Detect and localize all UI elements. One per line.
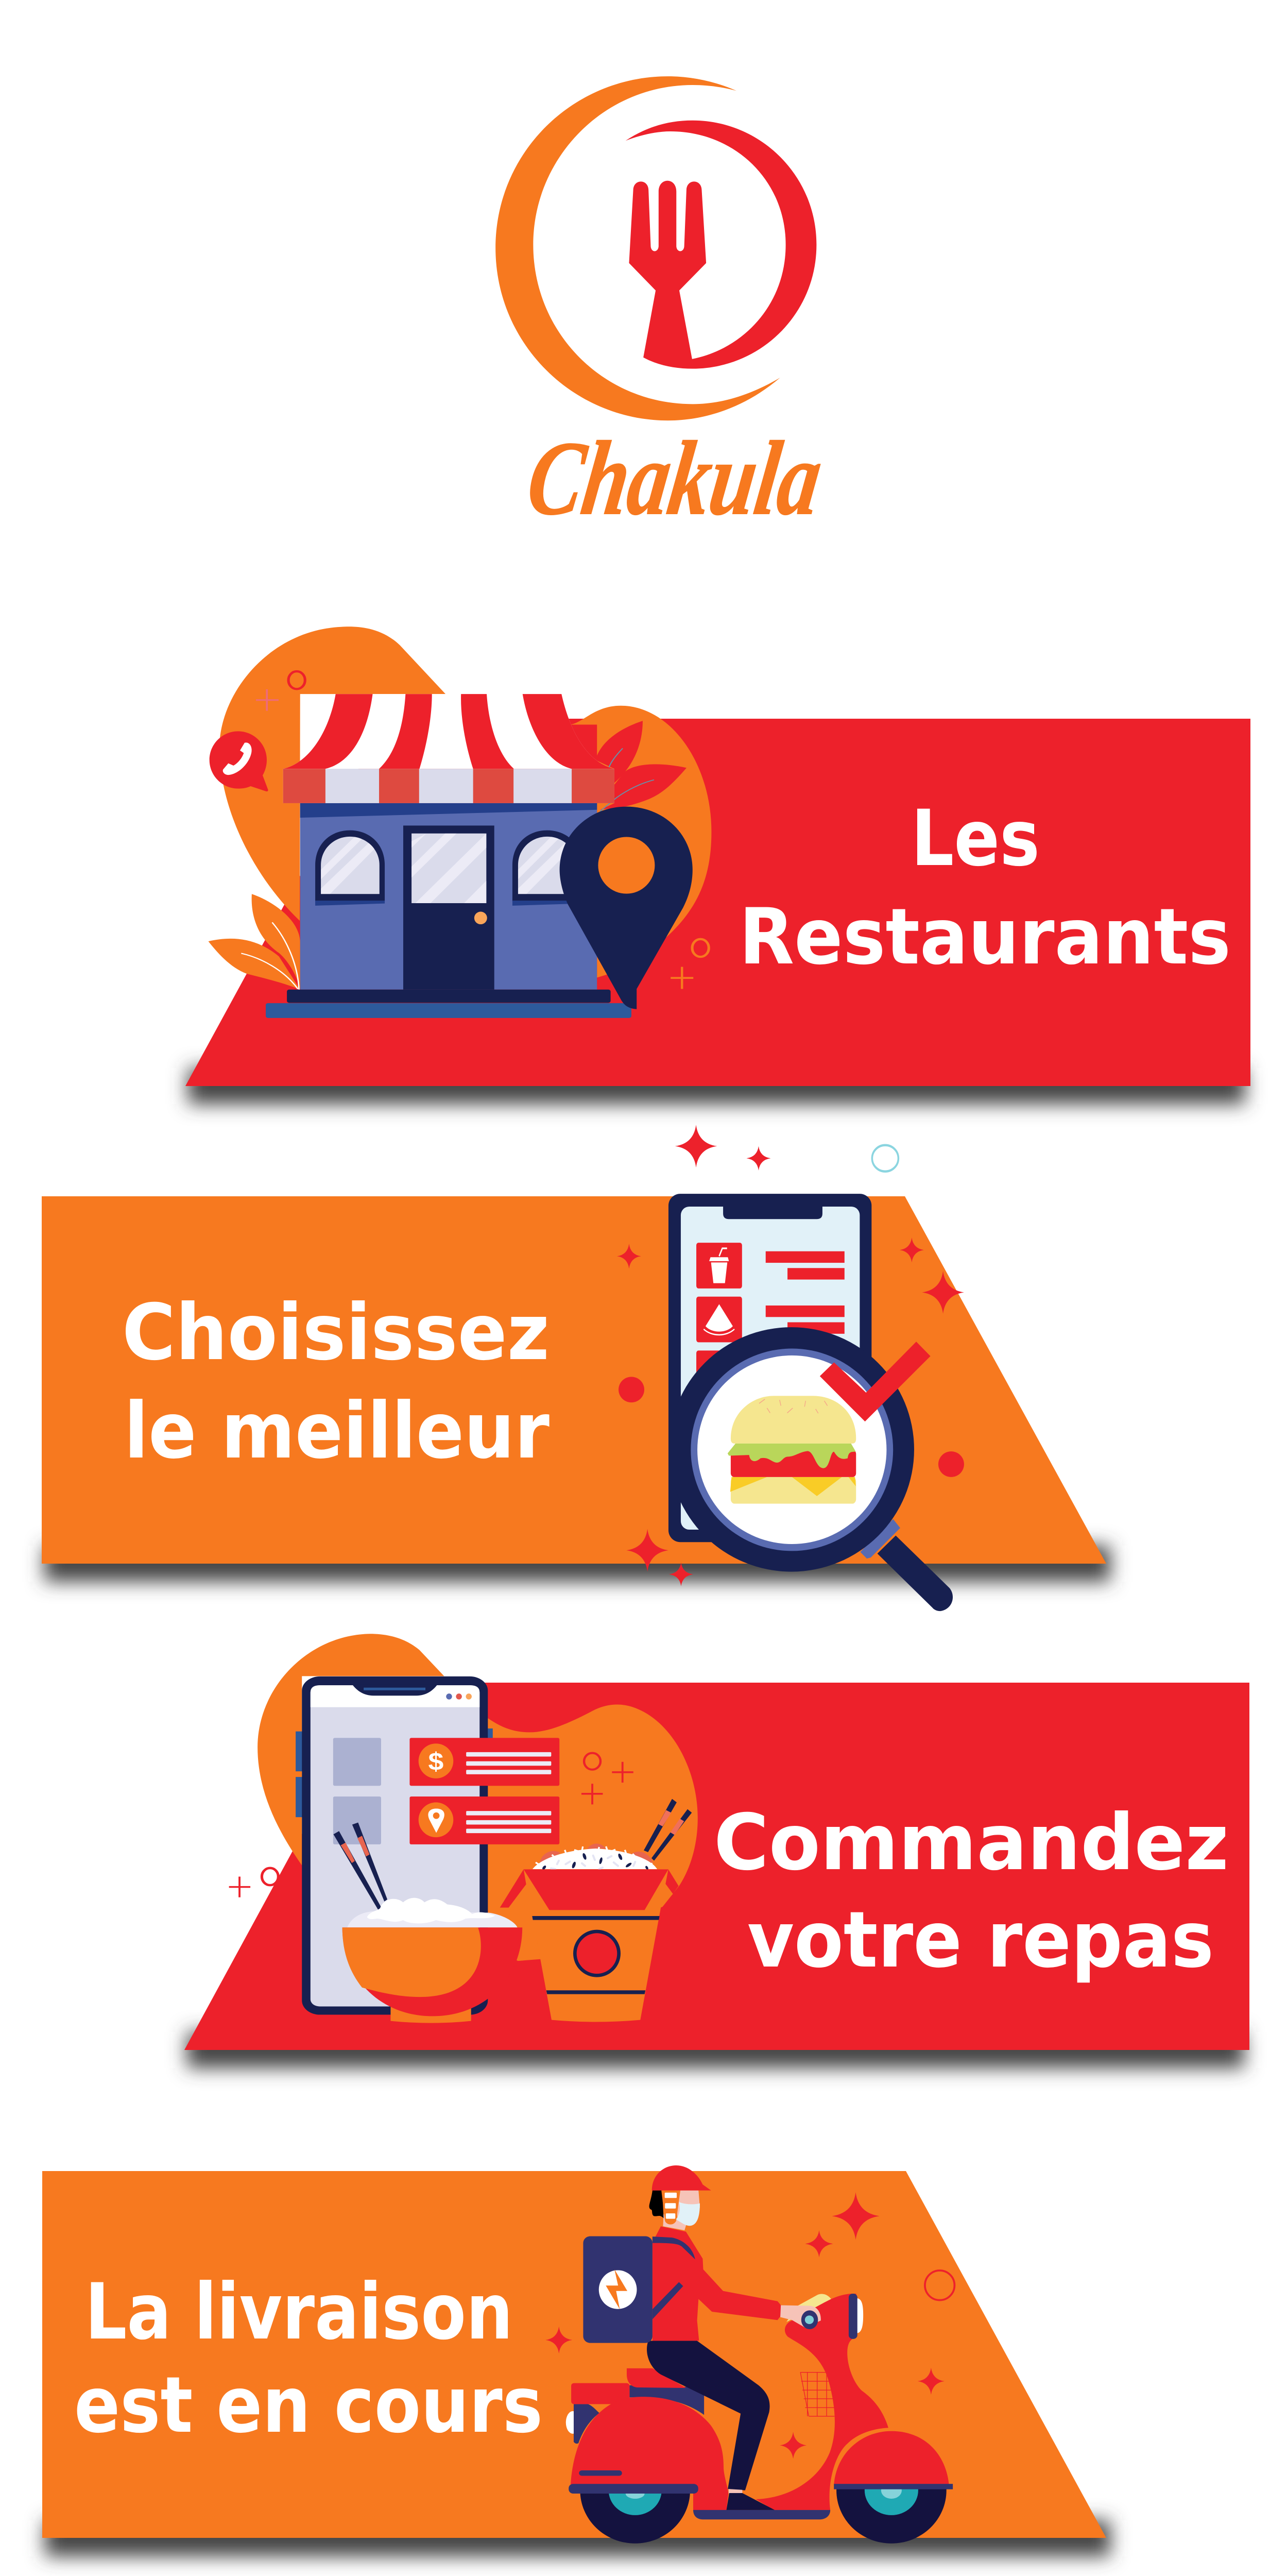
icon: map pin	[560, 807, 693, 1009]
box	[500, 1869, 679, 2022]
heading: Les Restaurants: Restaurants	[739, 892, 1231, 982]
heading: Commandez votre repas: Commandez	[714, 1798, 1229, 1888]
icon: wedge	[703, 1304, 734, 1335]
logo	[495, 76, 829, 537]
sparkles	[545, 2192, 945, 2459]
illustration: phone and magnifier	[617, 1125, 964, 1611]
chopsticks in box	[644, 1799, 692, 1861]
heading: Choisissez le meilleur	[122, 1288, 550, 1476]
illustration: delivery scooter	[545, 2165, 954, 2544]
red banner	[184, 1683, 1249, 2050]
shrimp	[540, 1843, 653, 1863]
icon: burger	[728, 1396, 856, 1504]
rice	[533, 1846, 657, 1870]
building	[266, 803, 631, 1018]
heading: Les Restaurants: Les	[911, 794, 1040, 884]
phone	[296, 1676, 493, 2015]
illustration: restaurant	[209, 626, 711, 1018]
decorative rings and plus signs	[229, 1753, 633, 1897]
chopsticks	[333, 1822, 387, 1910]
card: price	[409, 1738, 559, 1786]
orange banner	[42, 2171, 1106, 2538]
logo: red crescent and fork	[626, 121, 816, 369]
panel: La livraison est en cours	[42, 2165, 1110, 2556]
right window	[512, 831, 569, 906]
logo wordmark: Chakula	[521, 419, 829, 537]
cyan ring	[872, 1145, 898, 1172]
rider	[647, 2165, 821, 2510]
magnifier	[668, 1327, 953, 1611]
decorative rings and plus signs	[256, 671, 709, 989]
orange blobs	[219, 626, 711, 977]
heading: Les Restaurants	[739, 794, 1231, 982]
basket	[800, 2372, 834, 2416]
panel: Commandez votre repas	[184, 1634, 1249, 2068]
heading: Choisissez le meilleur: Choisissez	[122, 1288, 550, 1378]
heading: Choisissez le meilleur: le meilleur	[124, 1386, 550, 1476]
heading: La livraison est en cours: est en cours	[74, 2361, 543, 2450]
heading: Commandez votre repas: votre repas	[747, 1895, 1214, 1985]
sparkles	[617, 1125, 964, 1586]
scooter body	[566, 2294, 953, 2519]
panel: Les Restaurants	[185, 626, 1250, 1104]
icon: drink	[709, 1248, 729, 1283]
illustration: phone and food	[229, 1634, 698, 2023]
icon: red leaves	[595, 721, 687, 811]
phone	[668, 1194, 871, 1542]
icon: orange leaves	[209, 894, 300, 990]
left window	[315, 831, 387, 906]
heading: Commandez votre repas	[714, 1798, 1229, 1985]
heading: La livraison est en cours	[74, 2267, 543, 2450]
icon: noodle box	[500, 1799, 692, 2022]
icon: check mark	[820, 1342, 931, 1421]
icon: rice bowl	[342, 1898, 522, 2023]
orange banner	[42, 1196, 1106, 1564]
awning	[283, 694, 614, 803]
card: price: $	[428, 1748, 443, 1775]
red ring	[925, 2270, 954, 2300]
panel: Choisissez le meilleur	[42, 1125, 1110, 1611]
logo: orange crescent	[495, 76, 780, 420]
icon: phone bubble	[210, 731, 268, 791]
backpack	[583, 2236, 695, 2343]
red banner	[185, 719, 1250, 1086]
door	[403, 825, 494, 990]
card: location	[409, 1797, 559, 1844]
heading: La livraison est en cours: La livraison	[85, 2267, 513, 2357]
wheels	[580, 2437, 947, 2544]
orange blobs	[258, 1634, 698, 1961]
